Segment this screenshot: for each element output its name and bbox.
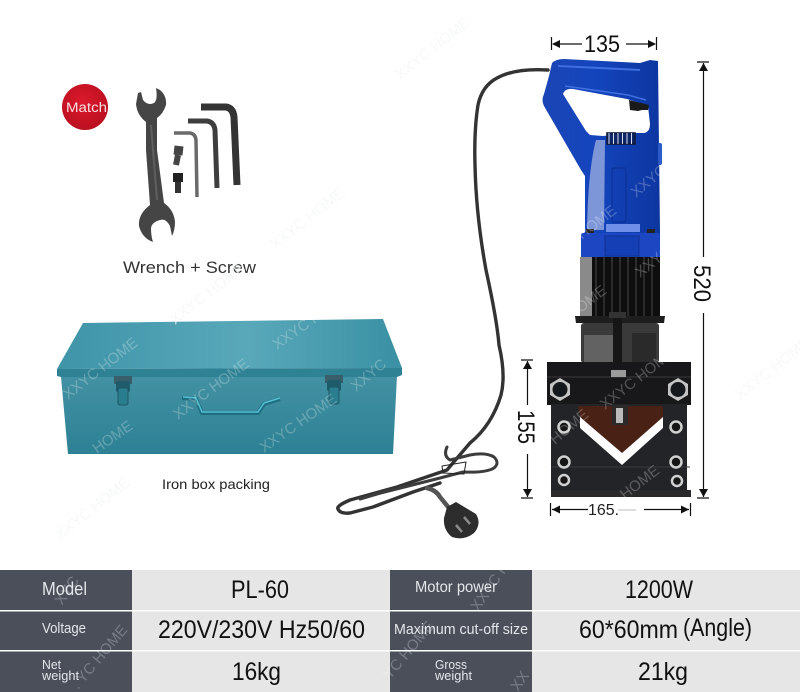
latch: left — [114, 376, 132, 405]
caption: Iron box packing: Iron box packing — [162, 476, 270, 492]
handle and motor housing — [542, 59, 660, 236]
watermark text on box: HOME — [90, 418, 136, 457]
table row: model and motor power: Motor power — [415, 579, 498, 596]
machine watermarks: HOME — [564, 282, 610, 323]
machine watermarks: XXYC — [628, 162, 670, 201]
side switch — [658, 143, 662, 165]
specification table — [0, 531, 800, 692]
table row: voltage and cut-off size: Voltage — [42, 620, 86, 637]
iron box — [57, 288, 402, 457]
table row: net and gross weight: weight — [41, 668, 79, 683]
watermark text on box: XXYC HOME — [270, 288, 353, 353]
faint page watermarks: XXYC HOME — [167, 259, 248, 328]
hydraulic cutter machine — [542, 59, 691, 503]
icon: hex keys and screws — [174, 107, 237, 197]
dimension: width 165 — [550, 502, 690, 519]
dimension: height 155 — [512, 360, 539, 498]
black motor body — [580, 257, 660, 317]
table row: voltage and cut-off size: 220V/230V Hz50/60 — [158, 616, 365, 644]
table row: model and motor power — [42, 576, 693, 604]
faint page watermarks: XXYC HOME — [267, 184, 348, 253]
copper die — [578, 406, 663, 453]
table row: net and gross weight — [41, 657, 688, 686]
icon: plug — [444, 502, 479, 538]
machine watermarks: HOME — [547, 406, 592, 448]
table watermarks: XXYC HOME — [467, 531, 533, 614]
dimension: height 520: 520 — [688, 265, 715, 302]
caption: Wrench + Screw: Wrench + Screw — [123, 258, 257, 277]
table row: net and gross weight: Gross — [435, 657, 467, 672]
table row: voltage and cut-off size: (Angle) — [683, 614, 752, 642]
table watermarks: YC HOME — [380, 618, 438, 683]
table row: net and gross weight: Net — [42, 657, 61, 672]
faint page watermarks: XXYC HOME — [392, 14, 473, 83]
watermark text on box: XXYC HOME — [257, 391, 340, 456]
cast pump block — [575, 312, 665, 370]
table watermarks: . YC HOME — [68, 622, 131, 692]
dimension: height 520 — [688, 62, 715, 498]
faint page watermarks — [52, 14, 800, 543]
box handle — [182, 397, 280, 413]
icon: double-ended wrench — [136, 88, 175, 242]
table row: model and motor power: 1200W — [625, 576, 693, 604]
cutter head plate — [547, 362, 691, 497]
latch: right — [325, 375, 343, 404]
badge: Match — [62, 84, 108, 130]
dimension: height 155: 155 — [512, 410, 539, 444]
badge: Match: Match — [66, 100, 107, 115]
table row: net and gross weight: weight — [434, 668, 472, 683]
vent grille — [607, 133, 635, 144]
table row: net and gross weight: 16kg — [232, 658, 281, 686]
faint page watermarks: XXYC HOME — [52, 474, 133, 543]
power cord with plug — [338, 70, 548, 513]
watermark text on box: XXYC HOME — [170, 355, 252, 423]
dimension: width 135: 135 — [584, 31, 620, 58]
machine watermarks: HOME — [574, 202, 620, 243]
small bolts — [558, 422, 682, 486]
blue collar — [581, 229, 660, 258]
trigger — [629, 100, 649, 111]
dimension: width 165: 165. — [588, 502, 619, 519]
table row: voltage and cut-off size: Maximum cut-off size — [394, 621, 528, 638]
watermark text on box — [60, 288, 390, 457]
table row: voltage and cut-off size — [42, 614, 752, 644]
large hex bolts — [550, 378, 688, 401]
watermark text on box: XXYC — [348, 356, 390, 395]
table row: voltage and cut-off size: 60*60mm — [579, 616, 678, 644]
machine watermarks: HOME — [617, 462, 663, 503]
V-shaped opening — [580, 417, 663, 465]
watermark text on box: XXYC HOME — [60, 334, 141, 403]
machine watermarks: XXYC — [632, 243, 675, 281]
table row: model and motor power: PL-60 — [231, 576, 289, 604]
machine watermarks: XXYC HOME — [597, 344, 678, 413]
housing highlights — [558, 66, 646, 232]
table watermarks — [51, 531, 533, 692]
table watermarks: XYC — [51, 573, 83, 608]
table row: net and gross weight: 21kg — [638, 658, 688, 686]
table row: model and motor power: Model — [42, 579, 87, 599]
blade bolt — [612, 405, 628, 425]
machine watermarks — [547, 162, 678, 503]
dimension: width 135 — [552, 31, 656, 58]
